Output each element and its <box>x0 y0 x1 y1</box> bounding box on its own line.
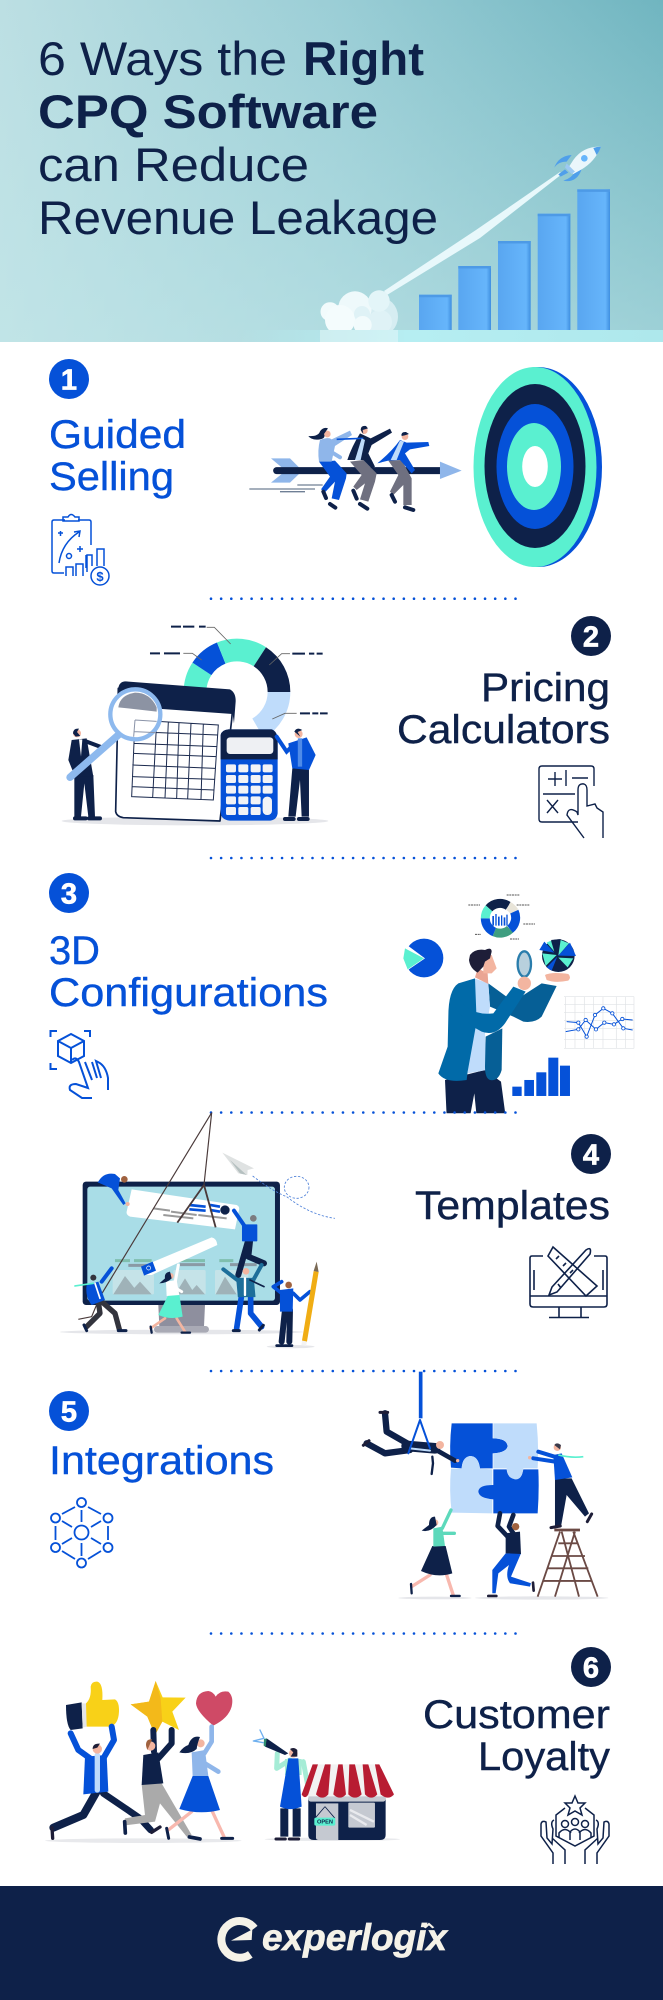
heading: 3D configurations: 3D <box>49 929 100 973</box>
climbing worker top <box>98 1174 130 1206</box>
number badge 4: 4 <box>583 1140 599 1172</box>
illustration: team riding arrow at target <box>249 367 602 567</box>
arrow <box>249 458 462 492</box>
floor shadows <box>60 1330 315 1348</box>
man in navy sweater <box>123 1730 200 1839</box>
worker on card <box>234 1211 264 1275</box>
search bar <box>141 1237 217 1276</box>
analyst figure <box>438 949 570 1117</box>
number badge 4 <box>571 1134 611 1174</box>
heading: pricing calculators: Calculators <box>397 708 610 752</box>
storefront: OPEN <box>317 1820 333 1826</box>
divider 4 <box>211 1370 516 1372</box>
bearded rider <box>337 426 392 509</box>
man in blue jacket <box>52 1727 160 1838</box>
logo: experlogix <box>262 1917 448 1958</box>
pencil <box>301 1262 319 1346</box>
illustration: customers and storefront <box>45 1681 400 1843</box>
heading: integrations: Integrations <box>49 1439 274 1483</box>
illustration: team building a page on a monitor <box>60 1113 335 1348</box>
woman pushing puzzle <box>411 1510 460 1596</box>
storefront <box>302 1764 394 1840</box>
title: CPQ Software <box>38 85 378 138</box>
number badge 1: 1 <box>61 364 77 396</box>
target <box>474 367 602 567</box>
right man <box>277 729 316 819</box>
puzzle <box>450 1423 539 1513</box>
number badge 5: 5 <box>61 1396 77 1428</box>
footer bar <box>0 1886 663 2000</box>
heading: pricing calculators: Pricing <box>481 666 610 710</box>
heading: guided selling: Guided <box>49 413 186 457</box>
donut chart <box>195 650 279 728</box>
panel: 5 integrations <box>49 1372 608 1600</box>
star <box>131 1681 186 1735</box>
heading: customer loyalty <box>423 1693 610 1779</box>
heading: customer loyalty: Customer <box>423 1693 610 1737</box>
man lifting puzzle <box>488 1513 534 1596</box>
divider 5 <box>211 1632 516 1635</box>
divider 3 <box>211 1111 516 1114</box>
woman <box>151 1265 190 1333</box>
pie chart right <box>539 939 576 972</box>
woman rider <box>308 428 352 508</box>
line chart on grid <box>564 997 634 1048</box>
bar chart small <box>512 1058 570 1096</box>
icon: smoke cloud <box>320 290 398 330</box>
thumbs up <box>66 1682 119 1730</box>
arrow with riders <box>249 426 462 510</box>
worker lifting climber <box>223 1265 264 1331</box>
woman in blue skirt <box>167 1727 233 1838</box>
title: Right <box>303 32 424 85</box>
heading: customer loyalty: Loyalty <box>478 1735 610 1779</box>
divider 2 <box>211 857 516 859</box>
icon: calculator and hand <box>539 766 603 838</box>
panel: 6 customer loyalty <box>45 1647 611 1864</box>
icon: monitor with ruler and pencil <box>530 1247 607 1318</box>
title <box>38 32 438 244</box>
pencil holder <box>273 1282 310 1346</box>
number badge 5 <box>49 1391 89 1431</box>
pointing rider <box>377 432 429 510</box>
number badge 6: 6 <box>583 1652 599 1684</box>
shadow <box>62 817 328 825</box>
calculator <box>221 729 278 821</box>
heading: 3D configurations: Configurations <box>49 971 328 1015</box>
illustration: team assembling puzzle <box>363 1372 608 1600</box>
magnifying glass <box>70 689 160 777</box>
icon: rocket <box>554 147 601 181</box>
ladder <box>538 1530 598 1597</box>
icon: hands with star and people <box>541 1796 609 1864</box>
rocket trail <box>384 172 562 295</box>
donut chart top <box>468 895 535 939</box>
panel: header banner <box>0 0 663 342</box>
panel: 3 3D configurations <box>49 873 634 1117</box>
heading: guided selling: Selling <box>49 455 174 499</box>
illustration: analyst inspecting charts <box>402 895 634 1117</box>
logo mark <box>221 1921 254 1958</box>
heading: pricing calculators <box>397 666 610 752</box>
number badge 1 <box>49 359 89 399</box>
icon: clipboard chart: $ <box>96 569 104 584</box>
title: 6 Ways the <box>38 32 287 85</box>
rope puller <box>75 1268 126 1331</box>
panel: 4 templates <box>60 1113 611 1348</box>
left man <box>68 729 100 818</box>
number badge 6 <box>571 1647 611 1687</box>
heading: 3D configurations <box>49 929 328 1015</box>
icon: cube and hand <box>50 1031 108 1098</box>
floor shadows <box>398 1596 608 1600</box>
number badge 3: 3 <box>61 878 77 910</box>
suspended worker <box>363 1372 459 1474</box>
pie chart left <box>402 939 443 977</box>
icon: hexagon network <box>51 1498 112 1568</box>
number badge 2 <box>571 616 611 656</box>
heading: guided selling <box>49 413 186 499</box>
calendar sheet <box>116 681 236 821</box>
shopkeeper with megaphone <box>253 1730 308 1839</box>
floor shadows <box>45 1838 400 1843</box>
title: Revenue Leakage <box>38 191 438 244</box>
heading: templates: Templates <box>415 1184 610 1228</box>
number badge 2: 2 <box>583 622 599 654</box>
title: can Reduce <box>38 138 309 191</box>
panel: 1 guided selling <box>49 359 602 585</box>
worker on ladder <box>528 1443 592 1528</box>
bar chart: rising bars <box>419 189 610 330</box>
page card <box>127 1189 239 1229</box>
chart labels <box>150 627 328 719</box>
hoist ropes <box>78 1113 216 1319</box>
illustration: calendar donut calculator <box>62 627 328 825</box>
divider 1 <box>211 597 516 600</box>
panel: 2 pricing calculators <box>62 616 611 838</box>
paper plane and dashed path <box>222 1153 335 1218</box>
number badge 3 <box>49 873 89 913</box>
icon: clipboard chart <box>52 514 109 585</box>
heart <box>196 1691 232 1726</box>
monitor <box>83 1182 280 1333</box>
